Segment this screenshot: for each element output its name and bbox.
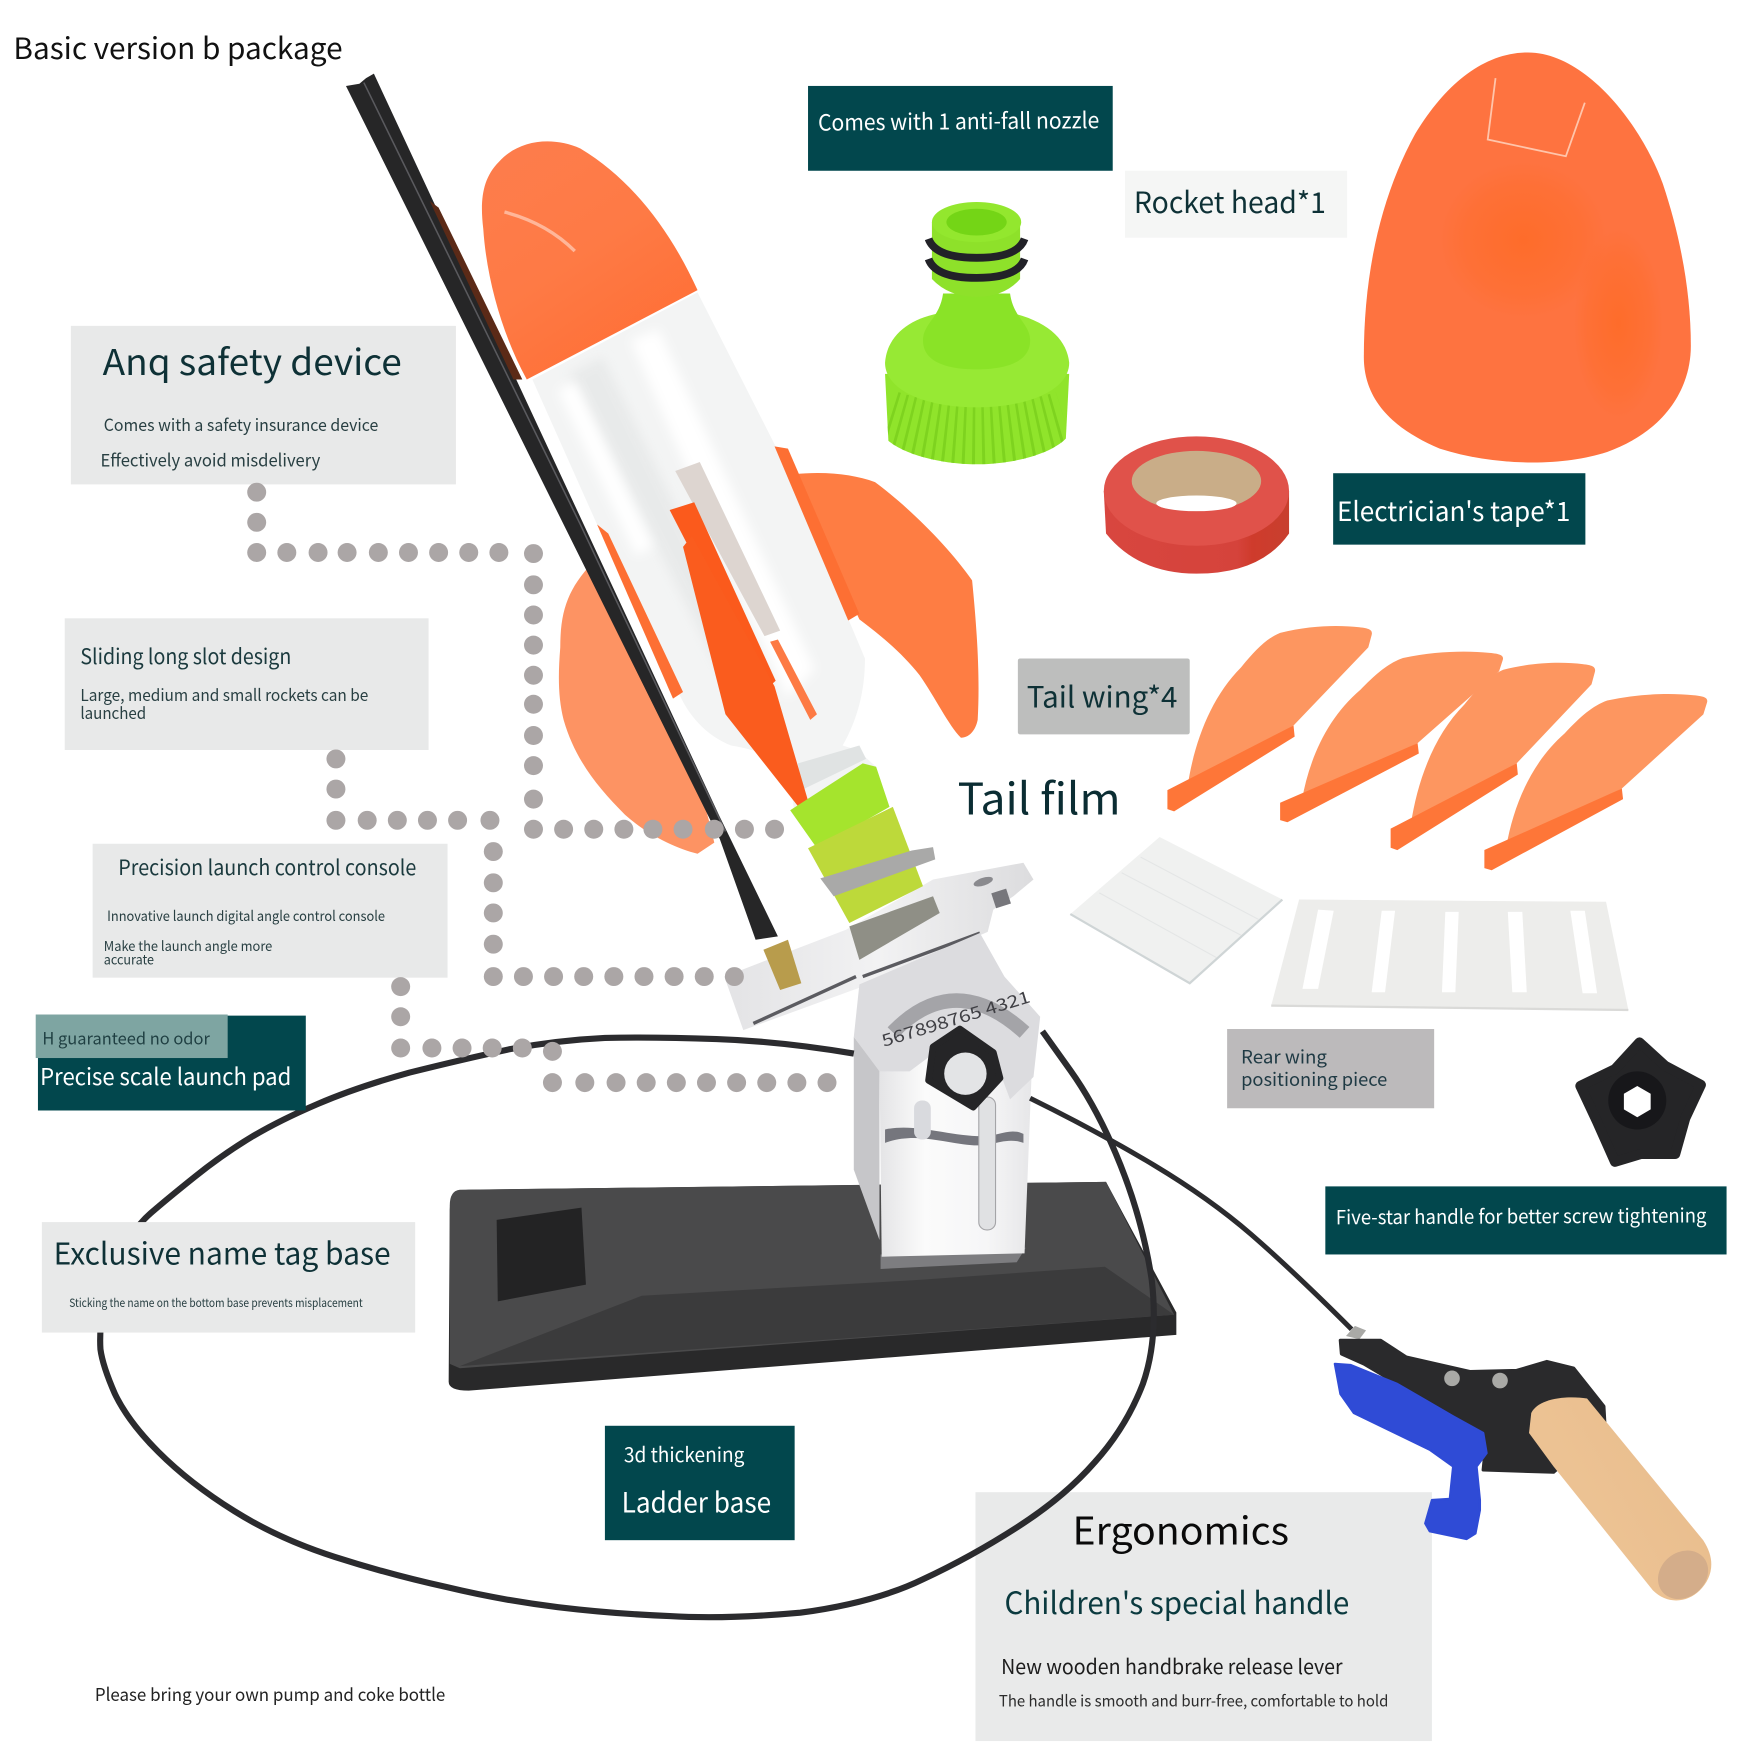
footnote: Please bring your own pump and coke bottle [95,1681,445,1707]
o-ring [929,259,1025,278]
text line: Comes with a safety insurance device [104,412,378,436]
sub-label: 3d thickening [624,1439,745,1468]
label: rocket head: Rocket head*1 [1134,180,1326,222]
stand shadow [881,1248,1026,1269]
product: rocket right tail fin [792,473,979,738]
label: five-star handle: Five-star handle for better screw tightening [1336,1199,1706,1230]
handle cable [1030,1098,1352,1329]
label: five-star handle [1325,1186,1727,1254]
sub-label: H guaranteed no odor [42,1026,210,1050]
product: tail film pad [1070,837,1282,983]
product: five-star knob on stand [929,1029,1000,1107]
panel: ladder base [605,1426,795,1540]
product: gold connector [763,940,801,990]
ribbed cap [790,763,890,848]
panel: sliding long slot design [65,618,429,750]
ergonomics text block [999,1501,1388,1711]
label: tail film: Tail film [958,765,1121,828]
label: tail wing [1018,658,1190,734]
stand angle numbers: 567898765 4321 [878,984,1033,1052]
top rim [932,202,1021,242]
text line: Large, medium and small rockets can be [80,682,368,706]
o-ring [929,239,1025,258]
product: rear wing positioning piece [1271,900,1628,1010]
heading: Precision launch control console [118,851,416,882]
heading: Sliding long slot design [80,640,291,671]
label: electrician's tape: Electrician's tape*1 [1337,490,1570,529]
clamp [820,847,935,896]
panel: ergonomics handle background [975,1492,1432,1741]
label: anti-fall nozzle: Comes with 1 anti-fall nozzle [818,103,1099,138]
product: rocket left tail fin [559,558,714,854]
product: electrician's tape [1104,436,1289,574]
product: rocket nose cone [482,141,698,379]
acrylic platform [724,863,1033,1030]
platform streaks [753,933,980,1023]
product: tail wings [1167,626,1707,870]
text line: Sticking the name on the bottom base prevents misplacement [69,1294,363,1311]
text line: Innovative launch digital angle control console [107,906,385,926]
dotted connector: control console to stand [391,977,836,1092]
stand slots [979,1097,996,1230]
product: rocket bottle body [532,292,876,843]
sub-label background [36,1015,228,1058]
heading: Ergonomics [1073,1501,1289,1556]
label: rear wing positioning piece [1227,1029,1434,1108]
text line: New wooden handbrake release lever [1001,1650,1344,1680]
title: Basic version b package [13,25,343,68]
text line: accurate [104,948,154,968]
heading: Ladder base [622,1481,771,1521]
panel: exclusive name tag base [42,1222,415,1333]
lime collar [808,807,923,923]
product: wooden handbrake handle [1335,1326,1718,1609]
panel: anq safety device [71,326,456,484]
label: rear wing positioning piece: positioning piece [1241,1066,1387,1092]
panel: precision launch control console [93,844,448,978]
text line: Make the launch angle more [104,935,272,955]
heading: Anq safety device [103,335,402,386]
product: rocket head [1364,52,1691,463]
product: bottle nozzle assembly [790,763,940,960]
gray connector [849,896,940,960]
stand arch [854,933,1040,1099]
label: tail wing: Tail wing*4 [1027,675,1177,717]
product: ladder base [449,1182,1176,1391]
product: launch rod [346,74,778,940]
label: rear wing positioning piece: Rear wing [1241,1044,1328,1070]
label: rocket head [1125,171,1347,238]
heading: Precise scale launch pad [40,1058,291,1092]
dotted connector: sliding slot to platform [326,749,744,986]
text line: The handle is smooth and burr-free, comfortable to hold [999,1689,1388,1711]
cable end [1346,1326,1366,1339]
heading: Exclusive name tag base [54,1230,391,1274]
text line: Effectively avoid misdelivery [100,447,320,472]
wood grip [1529,1397,1711,1600]
reflection band [885,1128,1023,1145]
panel: precise scale launch pad [36,1015,306,1110]
ribbed nut [885,374,1069,464]
shoulder [885,312,1069,407]
product: anti-fall nozzle [885,202,1069,464]
label: electrician's tape [1333,473,1585,545]
number arc shading [893,1001,1025,1032]
stand side face [854,1037,879,1240]
label: anti-fall nozzle [808,86,1113,171]
blue lever [1335,1364,1487,1539]
text line: launched [80,700,146,724]
waist [923,294,1030,369]
lever body [1340,1340,1605,1472]
product: launch platform and stand [724,863,1040,1269]
cable [100,1031,1154,1617]
subheading: Children's special handle [1004,1578,1349,1623]
dotted connector: safety device to rod [247,483,784,839]
product: five-star knob [1580,1042,1701,1162]
neck [932,222,1020,297]
stand front [879,1055,1032,1257]
